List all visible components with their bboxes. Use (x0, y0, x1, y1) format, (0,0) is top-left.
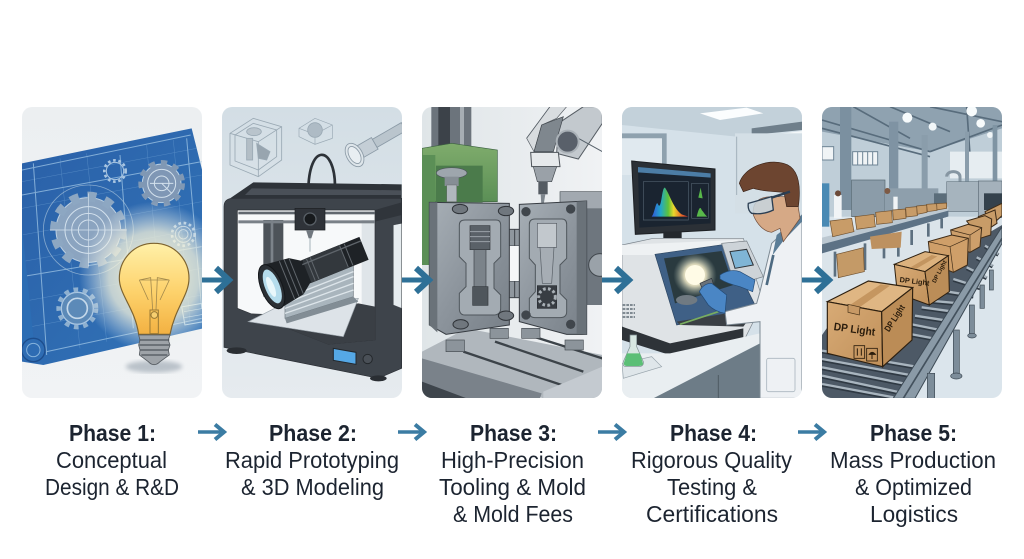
wireframe models (230, 118, 332, 177)
small gears (59, 160, 195, 327)
right mold plate (519, 201, 587, 334)
label: phase 2 (225, 420, 399, 500)
arrow: text row 3 to 4 (598, 424, 624, 440)
arrow: phase 2 to 3 (402, 268, 429, 292)
filament tube (307, 154, 336, 184)
panel: phase 2 3D printer (222, 107, 410, 398)
label: phase 5 (830, 420, 996, 527)
blueprint sheet (22, 128, 205, 365)
table rails (422, 328, 602, 398)
handling symbols (854, 346, 865, 358)
label: phase 4: Certifications (646, 501, 778, 527)
conveyor side rail (893, 227, 1002, 398)
panel: phase 5 mass production and logistics (822, 106, 1002, 398)
counter (622, 333, 760, 398)
lab ceiling (622, 107, 802, 137)
cardboard box middle (894, 252, 949, 305)
label: phase 3: Phase 3: (470, 420, 557, 446)
feet (227, 347, 247, 354)
cardboard boxes back (928, 203, 1002, 272)
cardboard box front: DP Light (882, 303, 907, 333)
label: phase 2: & 3D Modeling (241, 474, 384, 500)
printed layer block (285, 265, 353, 318)
roller conveyor (822, 225, 1002, 398)
lab wall window (622, 133, 667, 164)
glowing test bulb (673, 253, 717, 297)
press ram (436, 168, 467, 178)
large gear outline (43, 185, 133, 275)
flask (622, 335, 662, 378)
machines back row (822, 183, 829, 227)
label: phase 4: Testing & (667, 474, 757, 500)
workers (834, 195, 842, 218)
box label: DP Light (833, 321, 876, 339)
back machine (560, 191, 602, 208)
panel: phase 3 tooling and mold (422, 107, 611, 398)
left mold plate (429, 202, 514, 334)
conveyor legs (927, 270, 993, 398)
black flashlight (258, 236, 369, 310)
wireframe flashlight (344, 122, 402, 168)
control knob (363, 354, 372, 364)
label: phase 4: Rigorous Quality (631, 447, 792, 473)
label: phase 4: Phase 4: (670, 420, 757, 446)
label: phase 3: & Mold Fees (453, 501, 573, 527)
hinges (510, 228, 519, 246)
infographic: five phase process (22, 107, 1002, 527)
label: phase 3: Tooling & Mold (439, 474, 586, 500)
base floor (237, 303, 375, 344)
label: phase 5: Logistics (870, 501, 958, 527)
cardboard box middle: DP Light (932, 260, 949, 284)
arrow: phase 1 to 2 (202, 268, 229, 292)
label: phase 3: High-Precision (441, 447, 584, 473)
printer interior (238, 210, 375, 314)
green press body (422, 143, 497, 202)
upper conveyor (822, 210, 948, 253)
scientist (699, 162, 802, 398)
label: phase 3 (439, 420, 586, 527)
gloved hands (720, 271, 755, 292)
medium gear (142, 163, 182, 203)
printer back top (230, 182, 402, 198)
cardboard box middle: DP Light (899, 275, 931, 288)
label: phase 2: Phase 2: (269, 420, 357, 446)
rails and carriage (238, 212, 375, 214)
machine column (431, 107, 471, 150)
light bulb (80, 204, 202, 374)
label: phase 5: & Optimized (855, 474, 972, 500)
test machine (622, 238, 763, 355)
printer frame (224, 198, 402, 378)
label: phase 1 (45, 420, 179, 500)
arrow: phase 3 to 4 (602, 268, 629, 292)
monitor (632, 161, 715, 245)
label: phase 1: Design & R&D (45, 474, 179, 500)
cardboard box front (827, 281, 913, 367)
gap between molds (509, 246, 519, 281)
panel: phase 1 concept blueprint and light bulb (22, 107, 202, 398)
label: phase 4 (631, 420, 792, 527)
label: phase 1: Conceptual (56, 447, 167, 473)
upper row boxes (830, 203, 947, 237)
arrow: text row 2 to 3 (398, 424, 424, 440)
arrow: text row 1 to 2 (198, 424, 224, 440)
label: phase 5: Phase 5: (870, 420, 957, 446)
arrow: phase 4 to 5 (802, 268, 829, 292)
label: phase 1: Phase 1: (69, 420, 156, 446)
factory ceiling and walls (822, 107, 1002, 217)
control screen (333, 348, 356, 364)
arrow: text row 4 to 5 (798, 424, 824, 440)
label: phase 5: Mass Production (830, 447, 996, 473)
floor (822, 217, 1002, 302)
panel: phase 4 quality testing lab (622, 107, 802, 398)
label: phase 2: Rapid Prototyping (225, 447, 399, 473)
robot arm (526, 107, 602, 203)
